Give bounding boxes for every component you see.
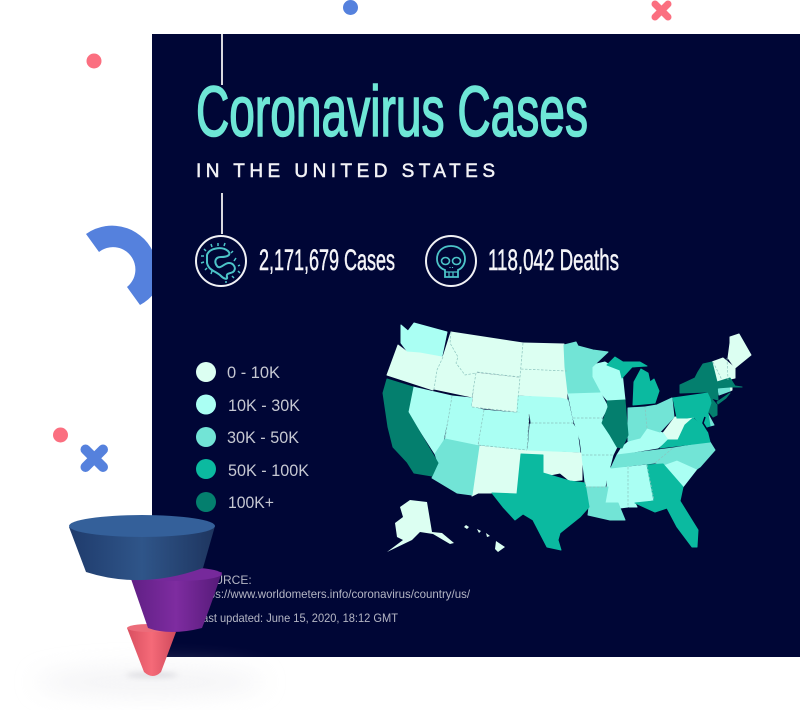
funnel: purple cone (130, 567, 222, 632)
map tier: 10K - 30K states (401, 323, 697, 508)
decoration: blue cross left (86, 450, 103, 467)
source text (196, 573, 471, 625)
decoration: pink dot top left (86, 54, 102, 68)
decoration: pink cross top (655, 4, 668, 17)
decoration: blue dot top (343, 0, 358, 15)
map tier: 100K+ states (383, 362, 742, 476)
map: United States (383, 323, 751, 552)
legend: 30K - 50K (227, 428, 300, 447)
icon: skull (426, 236, 476, 286)
stat: cases: 2,171,679 Cases (259, 244, 395, 277)
shadow under funnel (35, 668, 265, 696)
funnel: blue cone (69, 515, 215, 580)
legend: 10K - 30K (228, 396, 301, 415)
decoration: blue arc (86, 226, 155, 305)
connector line to stats (221, 193, 223, 234)
source text: https://www.worldometers.info/coronavirus/country/us/ (196, 587, 471, 601)
map tier: 50K - 100K states (492, 357, 712, 550)
map tier: 0 - 10K states (387, 332, 751, 552)
icon: virus (196, 236, 246, 286)
source text: SOURCE: (197, 573, 252, 587)
decoration: pink dot left (53, 428, 68, 442)
source text: Last updated: June 15, 2020, 18:12 GMT (196, 611, 399, 625)
connector line top (221, 34, 223, 85)
stat: deaths: 118,042 Deaths (488, 244, 619, 277)
map tier: 30K - 50K states (432, 342, 730, 520)
subtitle: IN THE UNITED STATES (196, 161, 495, 182)
legend: 100K+ (228, 493, 274, 512)
legend (196, 362, 310, 512)
legend: 50K - 100K (228, 461, 310, 480)
funnel: pink cone (127, 624, 176, 676)
map: bays (703, 417, 710, 433)
title: Coronavirus Cases (196, 73, 588, 152)
legend: 0 - 10K (227, 363, 281, 382)
funnel: 3D cones (69, 515, 222, 676)
panel: dark background (152, 34, 800, 657)
